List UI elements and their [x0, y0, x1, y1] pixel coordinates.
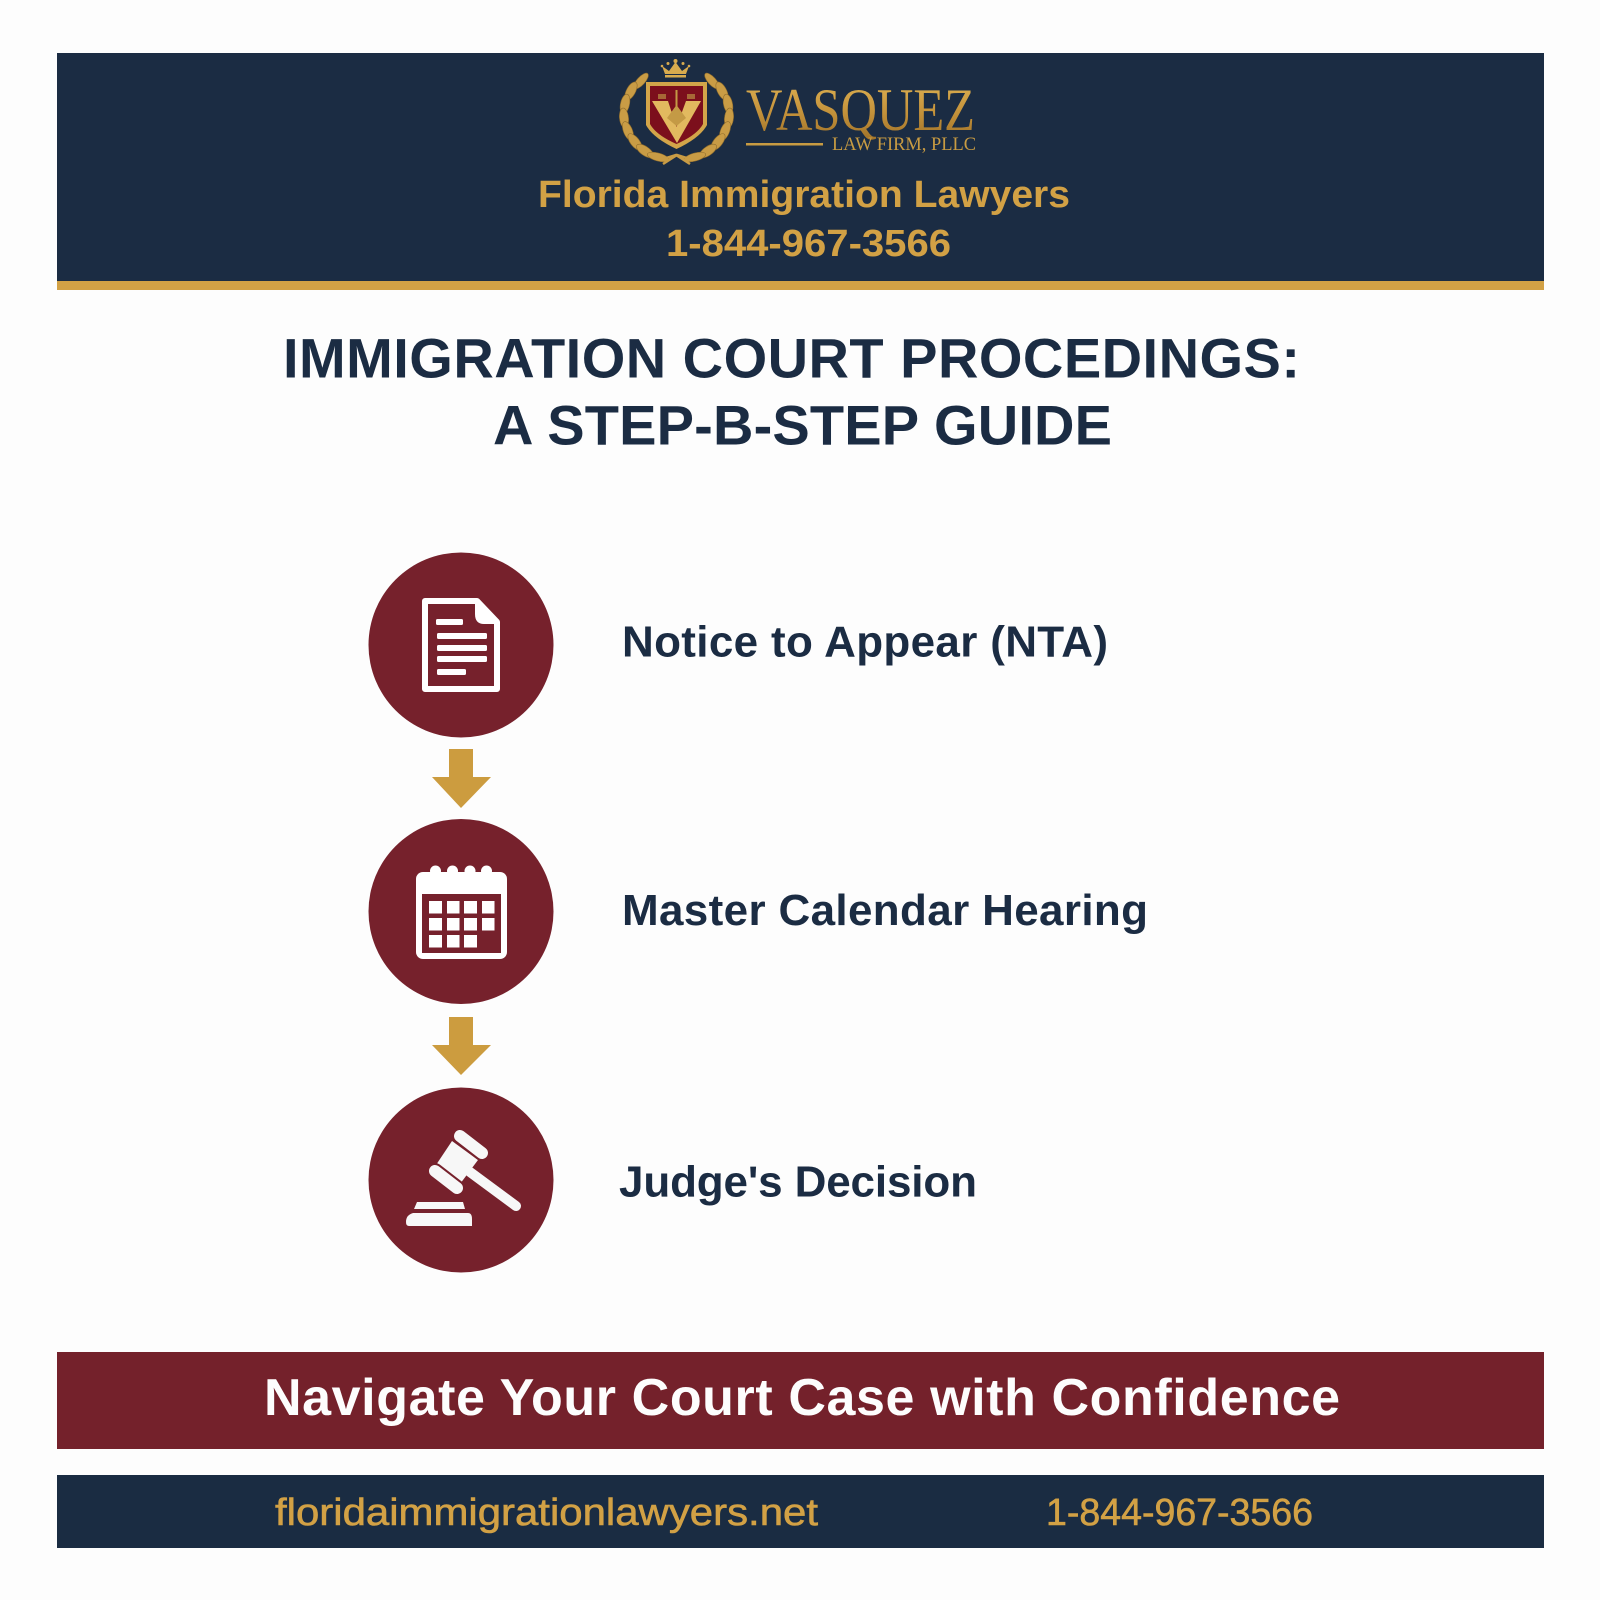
icon: shield with V — [646, 82, 707, 149]
banner: Navigate Your Court Case with Confidence: Navigate Your Court Case with Confidence — [264, 1369, 1340, 1427]
arrow: step 1 to step 2 — [432, 749, 491, 808]
footer bar — [57, 1475, 1544, 1548]
footer website: floridaimmigrationlawyers.net — [275, 1492, 818, 1534]
logo: Vasquez Law Firm — [618, 59, 976, 164]
banner: Navigate Your Court Case with Confidence — [57, 1352, 1544, 1449]
title: IMMIGRATION COURT PROCEDINGS: — [283, 326, 1300, 390]
logo subtitle: LAW FIRM, PLLC — [832, 134, 976, 155]
icon: crown — [661, 59, 690, 78]
step 3: Judge's Decision — [368, 1088, 977, 1272]
step 1: Notice to Appear — [368, 552, 1108, 738]
title — [283, 326, 1300, 456]
header phone: 1-844-967-3566 — [666, 223, 951, 265]
title: A STEP-B-STEP GUIDE — [493, 394, 1112, 456]
logo wordmark: VASQUEZ — [746, 77, 975, 143]
header panel — [57, 53, 1544, 290]
footer phone: 1-844-967-3566 — [1046, 1492, 1313, 1534]
step 2: Master Calendar Hearing — [368, 819, 1148, 1004]
step 1 label: Notice to Appear (NTA) — [622, 618, 1108, 666]
icon: gavel — [368, 1088, 554, 1272]
icon: calendar — [368, 819, 554, 1004]
icon: document — [368, 552, 554, 738]
header subtitle: Florida Immigration Lawyers — [538, 174, 1070, 216]
arrow: step 2 to step 3 — [432, 1017, 491, 1075]
step 3 label: Judge's Decision — [619, 1158, 977, 1206]
step 2 label: Master Calendar Hearing — [622, 886, 1148, 935]
icon: laurel wreath — [618, 71, 735, 164]
